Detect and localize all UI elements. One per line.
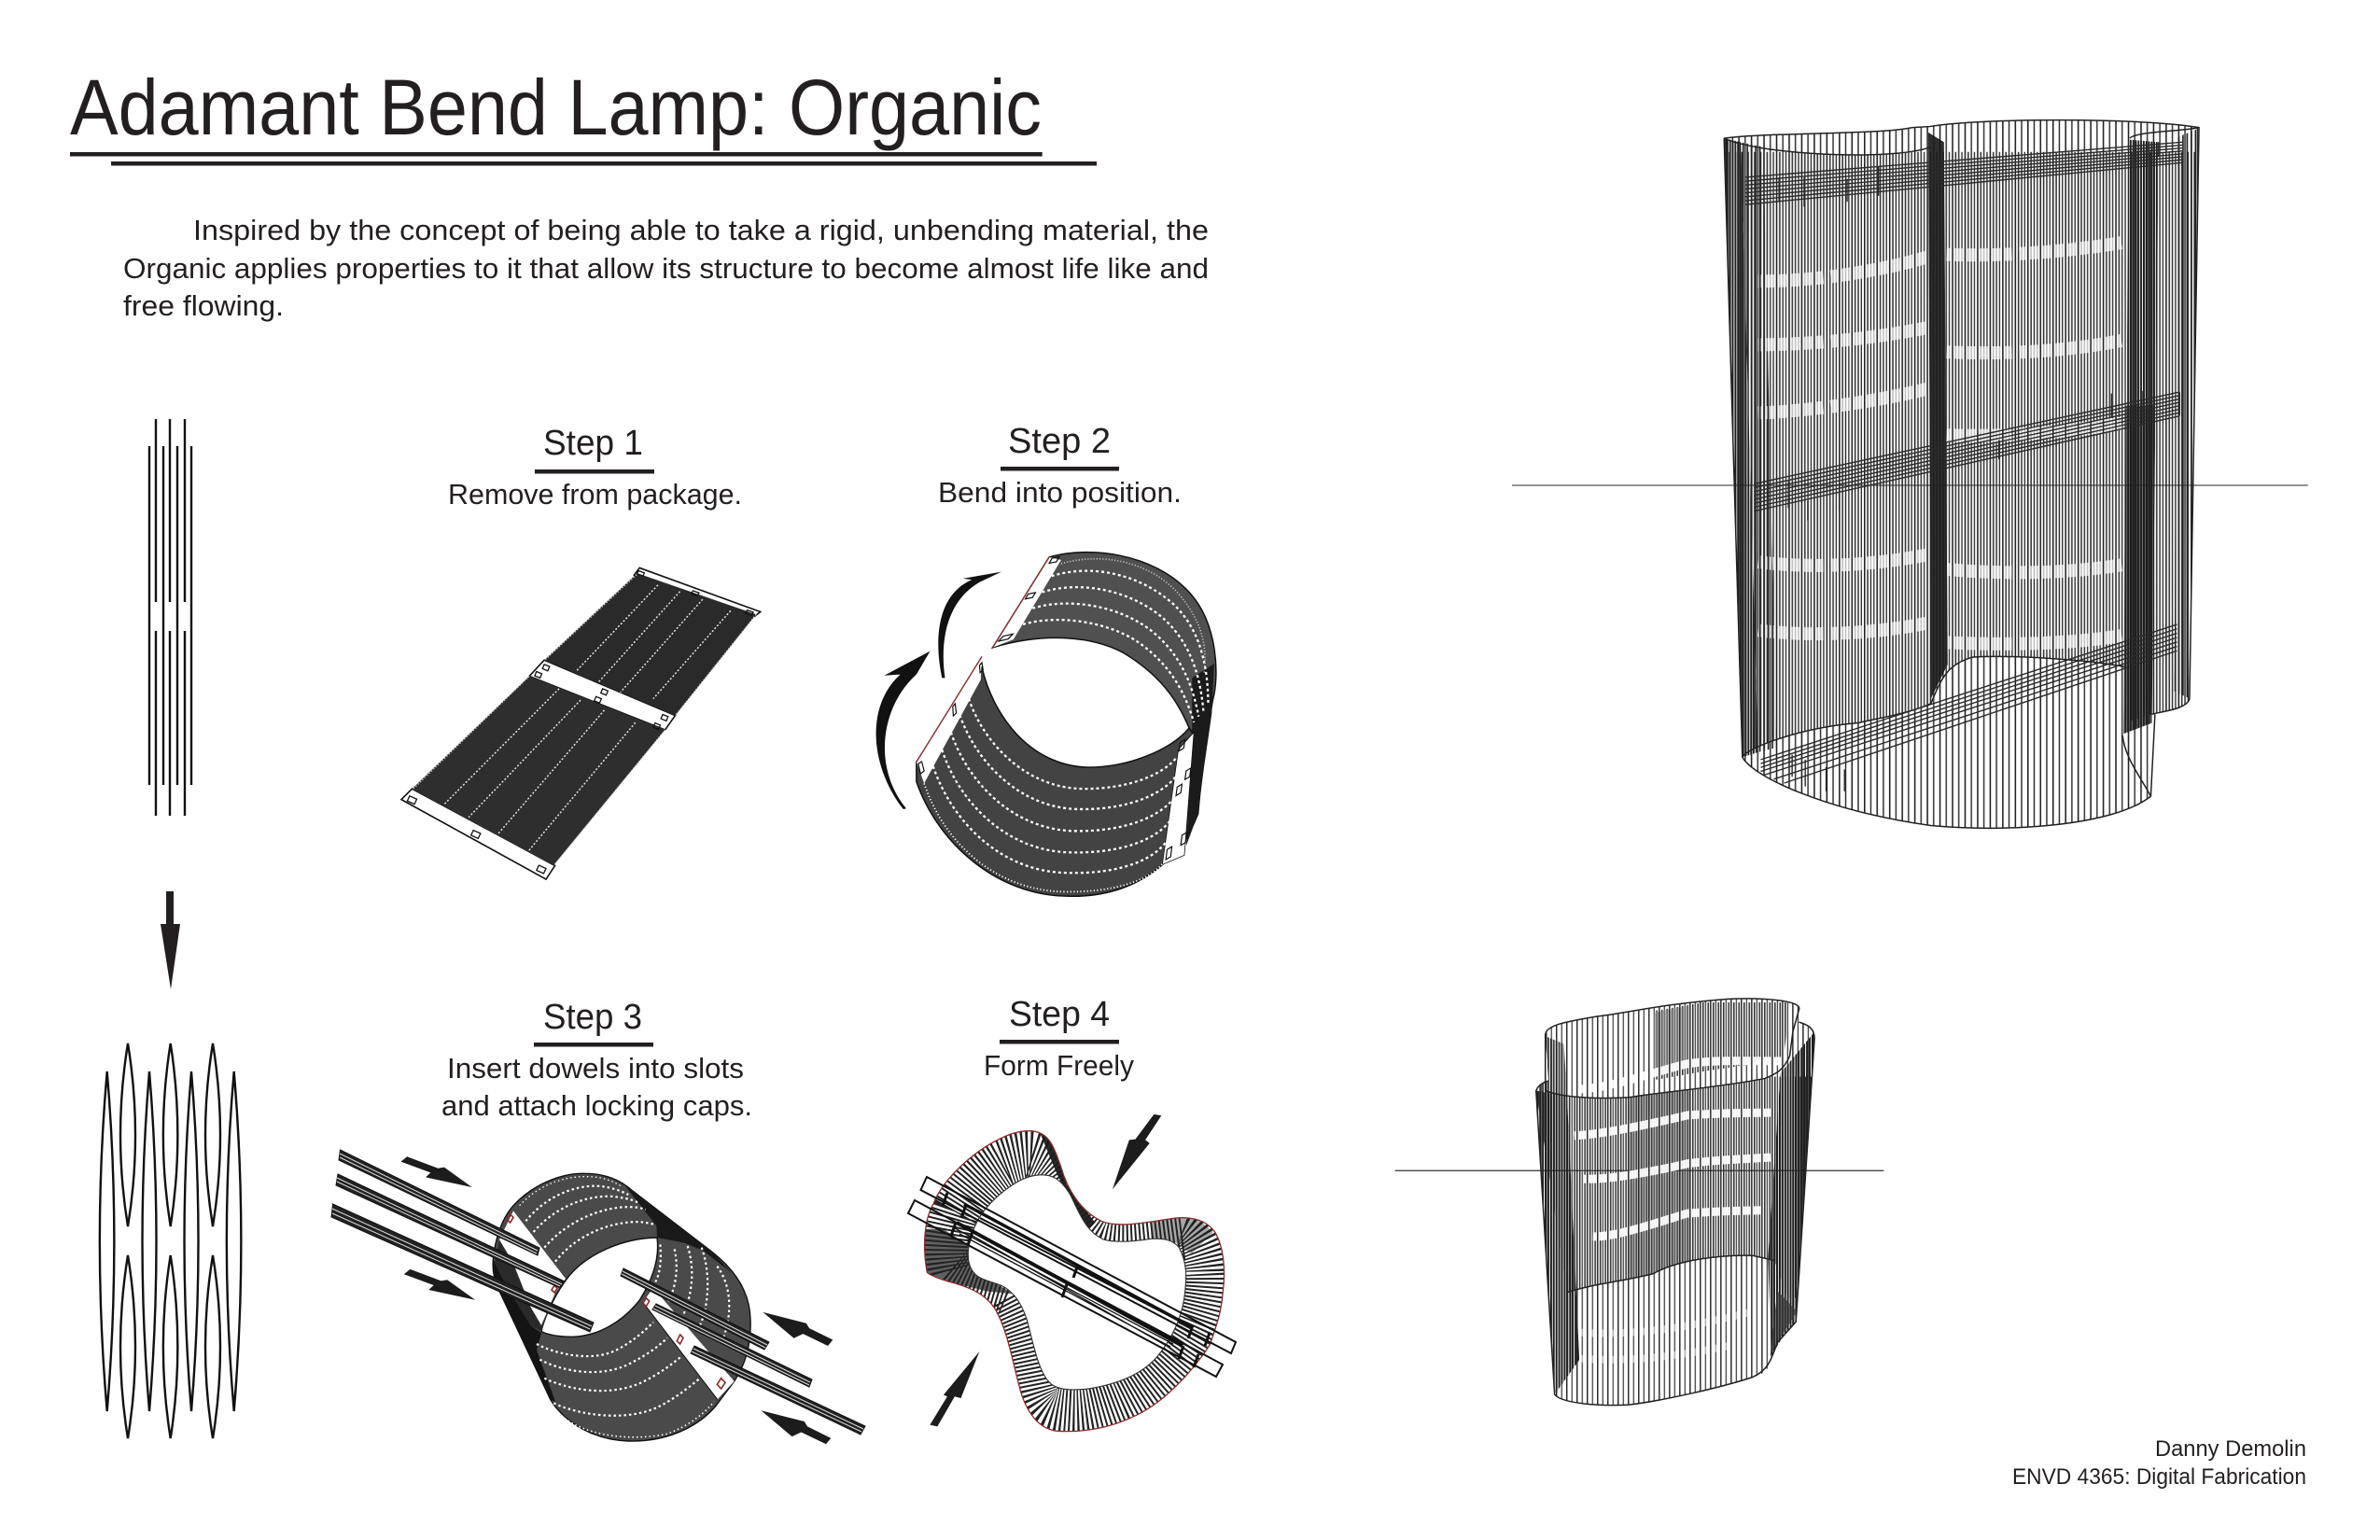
- horizon line: [1512, 484, 2308, 486]
- step 1 heading: [448, 424, 742, 511]
- red slots: [507, 1214, 725, 1389]
- slots on tabs: [918, 557, 1191, 860]
- step 3 heading: Step 3: [543, 998, 642, 1037]
- expanded slot pattern diagram: [100, 1043, 241, 1438]
- white end and middle bands: [401, 567, 761, 879]
- dark fold: [1186, 664, 1214, 846]
- icon: curved arrow upper: [938, 572, 1001, 678]
- slot gaps: [1530, 994, 1827, 1408]
- horizon line: [1395, 1169, 1883, 1171]
- outline: [1724, 120, 2199, 828]
- dark folds: [493, 1260, 555, 1402]
- step 4 heading: Step 4: [1009, 995, 1110, 1034]
- white tabs: [499, 1211, 566, 1325]
- step 2 drawing: bent cylinder: [876, 553, 1216, 896]
- dowels: [331, 1150, 865, 1435]
- dashed slots: [525, 1186, 729, 1416]
- dowels: [908, 1177, 1236, 1377]
- dashed slots: [933, 571, 1208, 873]
- intro text block: free flowing.: [123, 289, 284, 322]
- small lamp wireframe: [1395, 994, 1883, 1408]
- short vertical ribs: [1721, 118, 2204, 835]
- step 1 heading: Remove from package.: [448, 478, 742, 511]
- front wall: [917, 667, 1204, 896]
- dark folds: [1536, 1090, 1579, 1394]
- white tabs: [993, 557, 1061, 648]
- step 1 heading: Step 1: [543, 424, 643, 463]
- cylinder body: [493, 1173, 750, 1441]
- step 3 drawing: cylinder with dowels: [331, 1150, 865, 1444]
- step 3 heading: and attach locking caps.: [441, 1089, 752, 1122]
- credits: Danny Demolin: [2155, 1436, 2306, 1462]
- long vertical ribs: [1546, 999, 1814, 1405]
- arrows: [401, 1156, 833, 1444]
- large lamp wireframe: [1512, 118, 2308, 835]
- arrow top: [1113, 1114, 1161, 1189]
- step 3 heading: Insert dowels into slots: [447, 1052, 744, 1085]
- hatched band: [921, 1131, 1213, 1412]
- step 2 heading: Step 2: [1008, 422, 1111, 461]
- credits: ENVD 4365: Digital Fabrication: [2012, 1464, 2306, 1490]
- flat slot pattern diagram: [149, 419, 191, 816]
- icon: curved arrow lower: [876, 651, 931, 809]
- rails: [1745, 142, 2182, 791]
- step 2 heading: Bend into position.: [938, 476, 1182, 509]
- step 1 drawing: flat panel: [401, 567, 761, 879]
- back wall: [993, 553, 1216, 749]
- short vertical ribs: [1540, 999, 1809, 1405]
- step 4 heading: Form Freely: [984, 1049, 1134, 1082]
- arrow: flat to expanded: [161, 891, 180, 989]
- intro text block: [123, 214, 1209, 322]
- intro text block: Inspired by the concept of being able to take a rigid, unbending material, the: [193, 214, 1209, 246]
- step 2 heading: [938, 422, 1182, 509]
- slot gaps: [1758, 243, 2124, 644]
- credits: [2012, 1436, 2306, 1490]
- step 4 heading: [984, 995, 1134, 1082]
- long vertical ribs: [1721, 118, 2204, 835]
- step 4 drawing: organic form: [908, 1114, 1236, 1432]
- arrow bottom: [930, 1351, 979, 1426]
- step 3 heading: [441, 998, 752, 1122]
- dark folds: [1724, 138, 1758, 757]
- outline: [1536, 999, 1814, 1406]
- intro text block: Organic applies properties to it that allow its structure to become almost life like and: [123, 252, 1209, 285]
- title: Adamant Bend Lamp: Organic: [70, 63, 1042, 151]
